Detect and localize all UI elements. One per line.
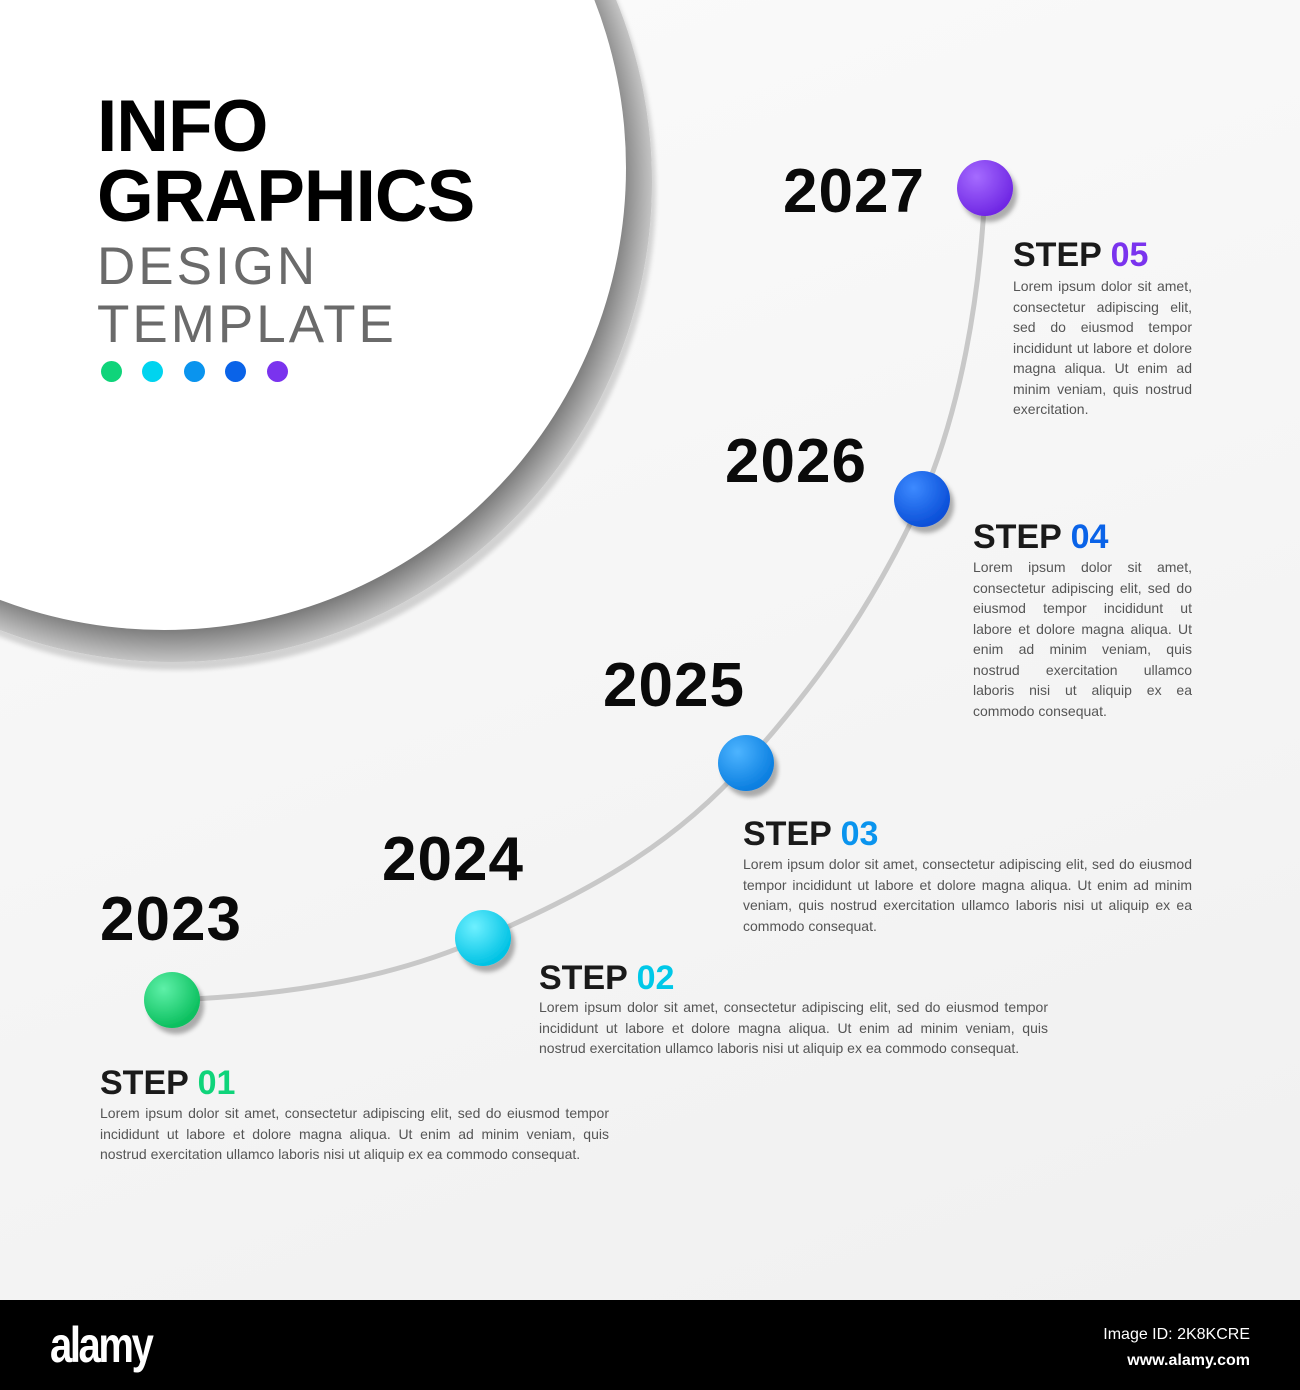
footer info: www.alamy.com xyxy=(1127,1352,1250,1369)
ball 2024 xyxy=(455,910,511,966)
text 01: Lorem ipsum dolor sit amet, consectetur adipiscing elit, sed do eiusmod tempor incididunt ut labore et dolore magna aliqua. Ut enim ad minim veniam, quis nostrud exercitation ullamco laboris nisi ut aliquip ex ea commodo consequat. xyxy=(100,1105,609,1162)
timeline path xyxy=(172,188,985,1000)
title: GRAPHICS xyxy=(97,156,474,237)
title xyxy=(97,86,474,354)
circle panel xyxy=(0,0,652,662)
step 04: STEP 04 xyxy=(973,518,1108,556)
year 2023: 2023 xyxy=(100,885,242,954)
year 2025: 2025 xyxy=(603,651,745,720)
title: TEMPLATE xyxy=(97,295,397,354)
step 05: STEP 05 xyxy=(1013,236,1148,274)
ball 2023 xyxy=(144,972,200,1028)
year 2026: 2026 xyxy=(725,427,867,496)
year 2027: 2027 xyxy=(783,157,925,226)
step 01: STEP 01 xyxy=(100,1064,235,1102)
ball 2027 xyxy=(957,160,1013,216)
text 04: Lorem ipsum dolor sit amet, consectetur adipiscing elit, sed do eiusmod tempor incididunt ut labore et dolore magna aliqua. Ut enim ad minim veniam, quis nostrud exercitation ullamco laboris nisi ut aliquip ex ea commodo consequat. xyxy=(973,559,1192,718)
text 05: Lorem ipsum dolor sit amet, consectetur adipiscing elit, sed do eiusmod tempor incididunt ut labore et dolore magna aliqua. Ut enim ad minim veniam, quis nostrud exercitation. xyxy=(1013,278,1192,417)
step 02: STEP 02 xyxy=(539,959,674,997)
step 03: STEP 03 xyxy=(743,815,878,853)
ball 2025 xyxy=(718,735,774,791)
ball 2026 xyxy=(894,471,950,527)
year 2024: 2024 xyxy=(382,825,524,894)
title: INFO xyxy=(97,86,267,167)
color dots xyxy=(101,361,288,382)
footer info xyxy=(1103,1326,1250,1369)
title: DESIGN xyxy=(97,237,318,296)
footer logo: alamy xyxy=(50,1317,151,1373)
text 03: Lorem ipsum dolor sit amet, consectetur adipiscing elit, sed do eiusmod tempor incididunt ut labore et dolore magna aliqua. Ut enim ad minim veniam, quis nostrud exercitation ullamco laboris nisi ut aliquip ex ea commodo consequat. xyxy=(743,856,1192,934)
text 02: Lorem ipsum dolor sit amet, consectetur adipiscing elit, sed do eiusmod tempor incididunt ut labore et dolore magna aliqua. Ut enim ad minim veniam, quis nostrud exercitation ullamco laboris nisi ut aliquip ex ea commodo consequat. xyxy=(539,999,1048,1056)
footer bar xyxy=(0,1300,1300,1390)
footer info: Image ID: 2K8KCRE xyxy=(1103,1326,1250,1343)
